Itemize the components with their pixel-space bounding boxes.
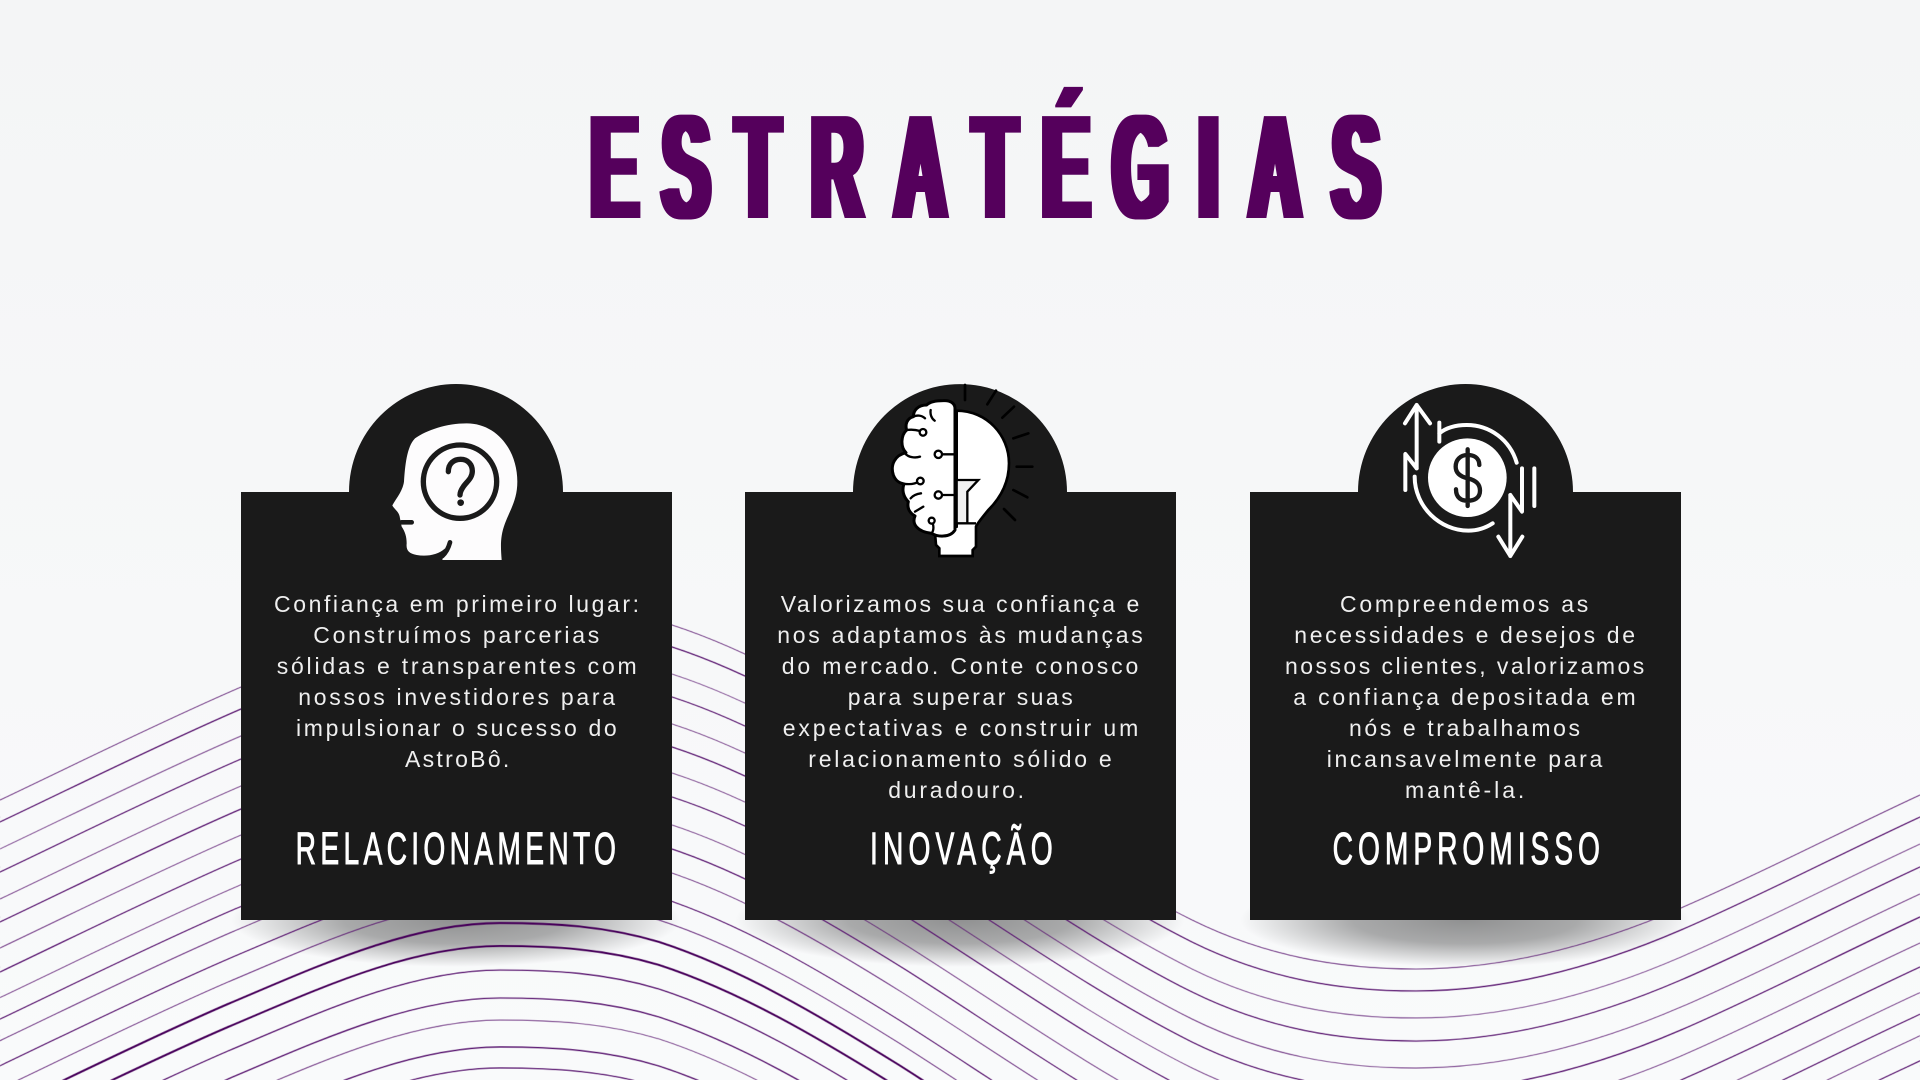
card shape <box>241 384 672 920</box>
body text: AstroBô. <box>405 746 509 772</box>
body text: necessidades e desejos de <box>1294 622 1635 648</box>
body text: nós e trabalhamos <box>1349 715 1580 741</box>
body text: para superar suas <box>848 684 1073 710</box>
body text <box>1285 591 1644 803</box>
body text <box>777 591 1143 803</box>
body text: duradouro. <box>888 777 1024 803</box>
heading: inovação: INOVAÇÃO <box>870 824 1053 875</box>
body text: a confiança depositada em <box>1293 684 1636 710</box>
panel: inovação <box>745 384 1176 920</box>
card shape <box>745 384 1176 920</box>
body text <box>274 591 639 772</box>
body text: mantê-la. <box>1405 777 1524 803</box>
body text: nossos investidores para <box>298 684 615 710</box>
body text: sólidas e transparentes com <box>277 653 637 679</box>
card shape <box>1250 384 1681 920</box>
body text: relacionamento sólido e <box>808 746 1112 772</box>
body text: Compreendemos as <box>1340 591 1588 617</box>
body text: impulsionar o sucesso do <box>296 715 617 741</box>
heading: compromisso: COMPROMISSO <box>1333 824 1600 875</box>
body text: do mercado. Conte conosco <box>782 653 1138 679</box>
panel: compromisso <box>1250 384 1681 920</box>
panel: relacionamento <box>241 384 672 920</box>
body text: Valorizamos sua confiança e <box>781 591 1139 617</box>
body text: incansavelmente para <box>1327 746 1603 772</box>
body text: Construímos parcerias <box>313 622 599 648</box>
title: ESTRATÉGIAS <box>591 84 1380 250</box>
body text: expectativas e construir um <box>783 715 1138 741</box>
card shadows <box>231 873 1690 967</box>
body text: nossos clientes, valorizamos <box>1285 653 1644 679</box>
body text: nos adaptamos às mudanças <box>777 622 1143 648</box>
wave line pattern <box>0 590 1920 1080</box>
icon: brain and light bulb <box>892 385 1032 556</box>
body text: Confiança em primeiro lugar: <box>274 591 639 617</box>
heading: relacionamento: RELACIONAMENTO <box>296 824 616 875</box>
icon: head with question mark <box>392 423 517 560</box>
icon: dollar coin with arrows <box>1405 405 1534 556</box>
